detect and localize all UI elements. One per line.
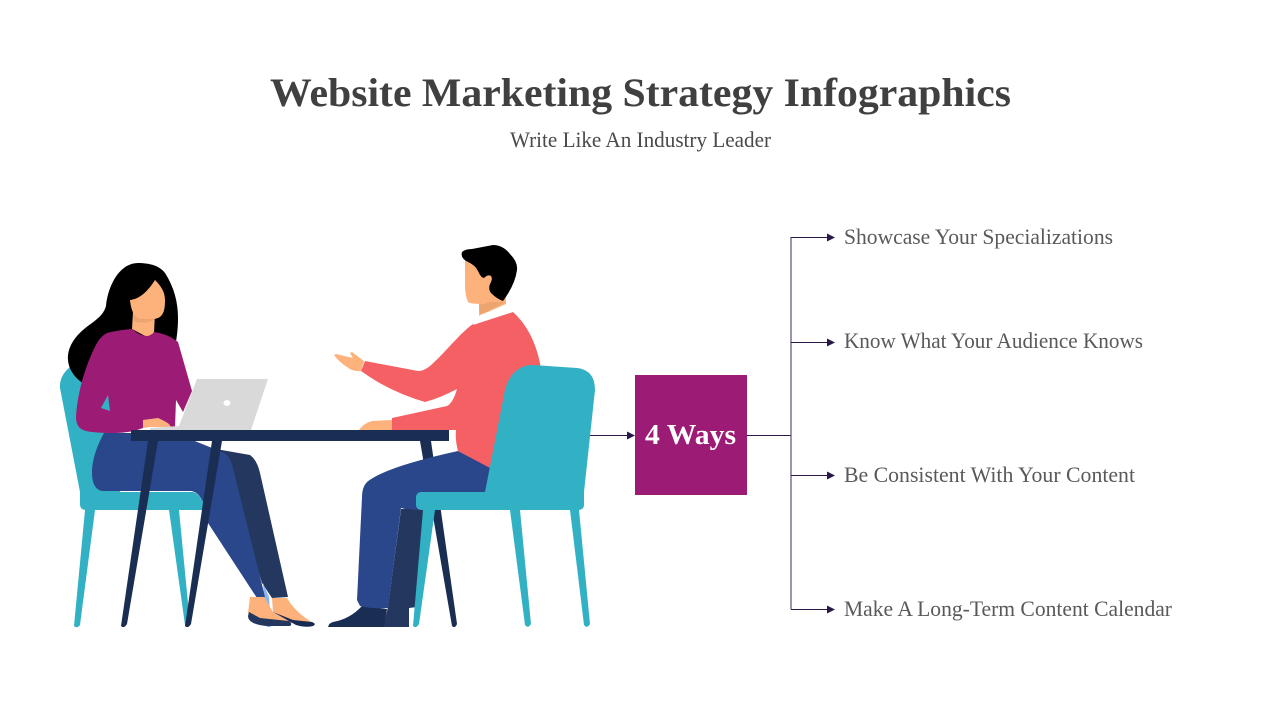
man hair bbox=[462, 245, 517, 301]
table far leg bbox=[420, 441, 457, 627]
list item 2: Know What Your Audience Knows bbox=[844, 328, 1143, 353]
laptop bbox=[150, 379, 268, 430]
list item 4: Make A Long-Term Content Calendar bbox=[844, 596, 1173, 621]
connector tree with arrows bbox=[747, 234, 835, 614]
list item 1: Showcase Your Specializations bbox=[844, 224, 1113, 249]
table bbox=[121, 430, 449, 627]
light blue sliver bbox=[263, 583, 271, 627]
center box: 4 Ways bbox=[635, 375, 747, 495]
man face bbox=[465, 258, 500, 304]
list item 3: Be Consistent With Your Content bbox=[844, 462, 1135, 487]
woman sweater bbox=[76, 329, 192, 433]
man raised hand bbox=[334, 352, 364, 371]
man neck and collar bbox=[479, 298, 506, 316]
woman shoes bbox=[248, 612, 291, 626]
woman hair bbox=[68, 263, 178, 400]
title: Website Marketing Strategy Infographics bbox=[270, 70, 1011, 115]
woman face bbox=[130, 280, 165, 319]
man trousers bbox=[357, 451, 492, 608]
right chair bbox=[413, 365, 595, 627]
woman hand bbox=[143, 418, 171, 428]
woman bbox=[68, 263, 315, 627]
chair gap in sweater bbox=[101, 395, 110, 411]
center box: 4 Ways: 4 Ways bbox=[645, 419, 736, 451]
man sweater bbox=[361, 312, 545, 468]
subtitle: Write Like An Industry Leader bbox=[510, 127, 772, 152]
man bbox=[328, 245, 545, 627]
woman trousers, far leg bbox=[170, 441, 288, 598]
man shoe bbox=[328, 606, 387, 627]
man lower hand bbox=[359, 420, 392, 430]
illustration: two people talking at a table bbox=[60, 245, 595, 627]
woman feet bbox=[248, 597, 290, 623]
left chair bbox=[60, 367, 203, 627]
woman trousers, near leg bbox=[92, 433, 265, 598]
man far leg bbox=[383, 507, 433, 627]
arrow: illustration to box bbox=[590, 432, 635, 440]
woman neck bbox=[132, 312, 155, 337]
